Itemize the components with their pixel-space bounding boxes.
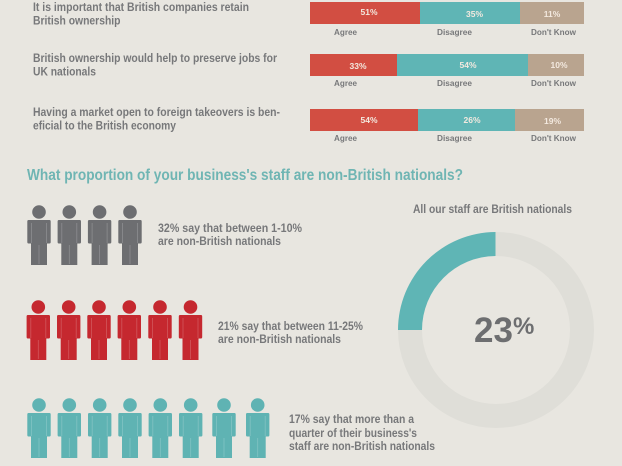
statement text 1: [33, 2, 249, 28]
text: 21 percent: [218, 321, 363, 346]
statement row 3: [33, 107, 584, 143]
bar labels 3: Agree: [334, 133, 357, 143]
donut heading: All our staff are British nationals: [413, 204, 572, 216]
bar labels 2: Agree: [334, 78, 357, 88]
heading: What proportion of your business's staff are non-British nationals?: [27, 167, 463, 184]
text: 17 percent: 17% say that more than a: [289, 414, 415, 426]
text: 17 percent: [289, 414, 435, 453]
statement text 2: British ownership would help to preserve jobs for: [33, 53, 277, 65]
icons: red people: [27, 300, 202, 360]
stacked bar 3: 54%: [360, 115, 378, 125]
statement text 3: eficial to the British economy: [33, 120, 177, 132]
text: 32 percent: are non-British nationals: [158, 236, 281, 248]
stacked bar 3: 26%: [463, 115, 481, 125]
bar labels 2: Don't Know: [531, 78, 576, 88]
stacked bar 1: 35%: [466, 9, 483, 19]
text: 21 percent: are non-British nationals: [218, 334, 341, 346]
stacked bar 2: 54%: [459, 60, 477, 70]
donut value: %: [513, 313, 534, 340]
statement text 3: [33, 107, 280, 132]
donut value: 23: [474, 311, 513, 350]
icons: grey people: [27, 205, 142, 265]
bar labels 1: [334, 27, 576, 37]
stacked bar 3: 19%: [544, 116, 561, 126]
stacked bar 2: 10%: [550, 60, 568, 70]
statement row 1: [33, 2, 584, 37]
text: 17 percent: staff are non-British nationals: [289, 441, 435, 453]
statement row 2: [33, 53, 584, 88]
text: 32 percent: [158, 223, 302, 248]
bar labels 1: Disagree: [437, 27, 472, 37]
bar labels 3: Disagree: [437, 133, 472, 143]
bar labels 2: [334, 78, 576, 88]
text: 32 percent: 32% say that between 1-10%: [158, 223, 302, 235]
statement text 2: [33, 53, 277, 78]
stacked bar 1: 51%: [360, 7, 378, 17]
text: 17 percent: quarter of their business's: [289, 428, 417, 440]
statement text 3: Having a market open to foreign takeovers is ben-: [33, 107, 280, 119]
icons: teal people: [27, 398, 269, 458]
stacked bar 2: [310, 54, 584, 76]
bar labels 3: Don't Know: [531, 133, 576, 143]
text: 21 percent: 21% say that between 11-25%: [218, 321, 363, 333]
statement text 1: It is important that British companies retain: [33, 2, 249, 14]
stacked bar 1: 11%: [544, 9, 561, 19]
stacked bar 1: [310, 2, 584, 24]
bar labels 2: Disagree: [437, 78, 472, 88]
bar labels 3: [334, 133, 576, 143]
statement text 1: British ownership: [33, 16, 120, 28]
bar labels 1: Agree: [334, 27, 357, 37]
stacked bar 2: 33%: [349, 61, 367, 71]
stacked bar 3: [310, 109, 584, 131]
donut chart: [398, 232, 582, 416]
statement text 2: UK nationals: [33, 66, 96, 78]
bar labels 1: Don't Know: [531, 27, 576, 37]
